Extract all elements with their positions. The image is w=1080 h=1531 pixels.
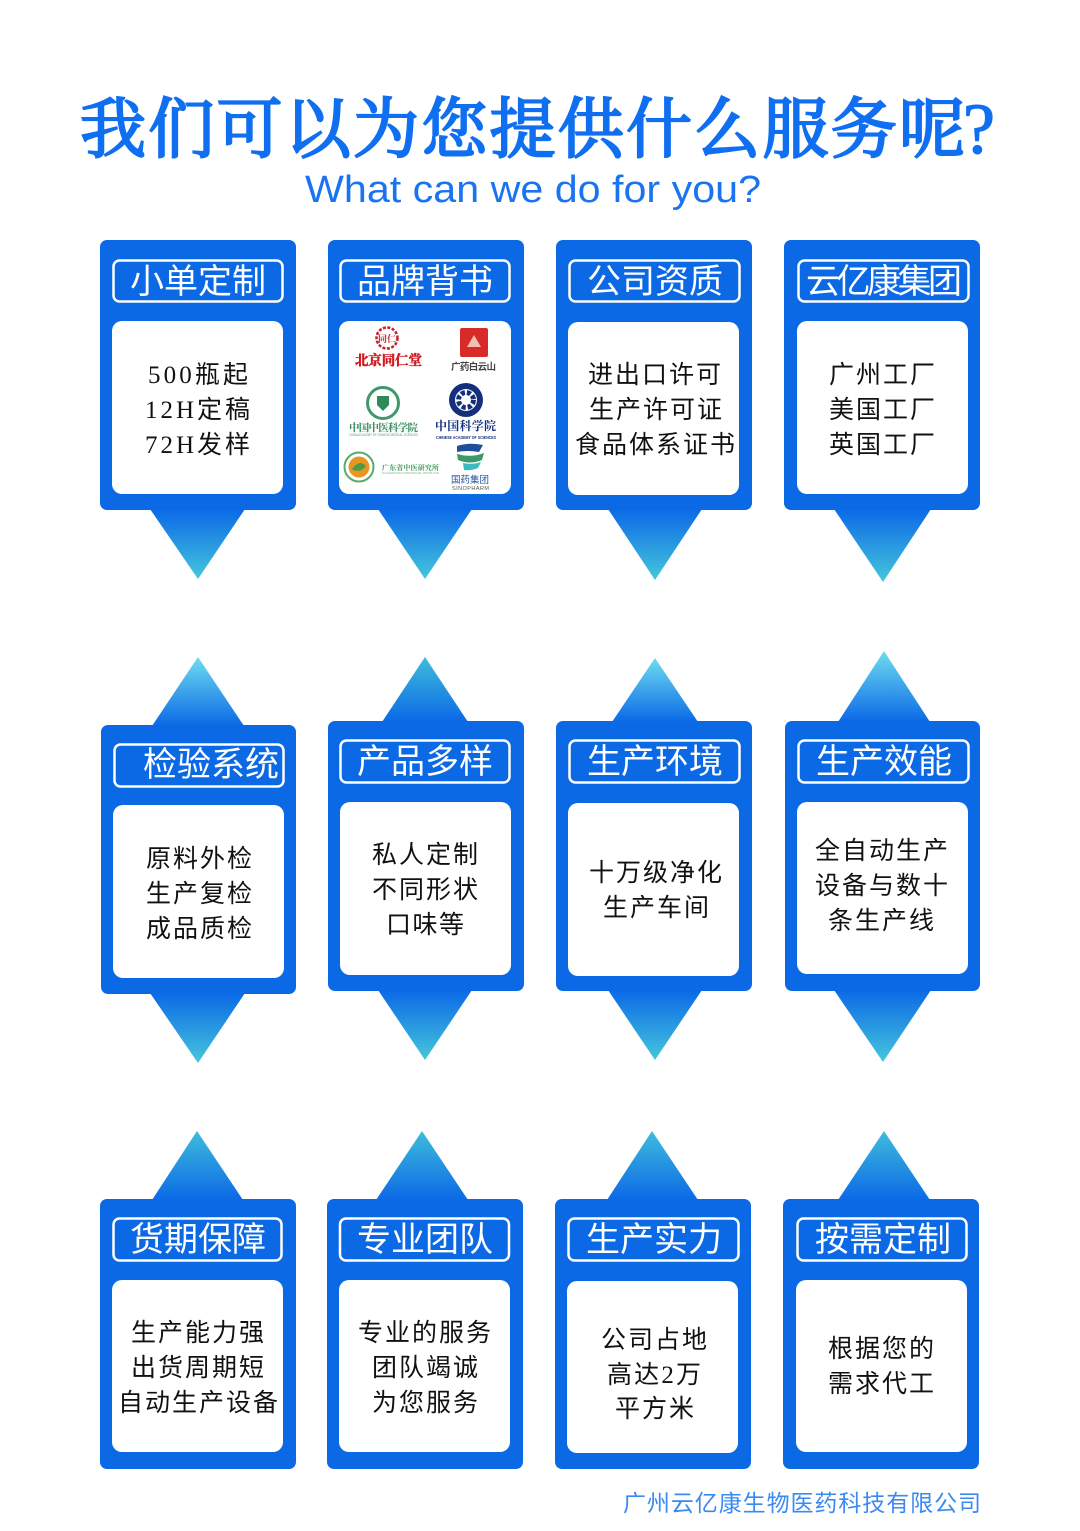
arrow: row 2 up column 1 — [152, 657, 244, 726]
panel: 货期保障: 生产能力强 — [131, 1319, 264, 1347]
panel: 生产效能: 设备与数十 — [815, 872, 948, 900]
panel: 云亿康集团: 美国工厂 — [829, 396, 935, 424]
logo: 国药集团: 国药集团 — [451, 474, 489, 486]
footer company name: 广州云亿康生物医药科技有限公司 — [623, 1490, 981, 1516]
panel: 产品多样: 私人定制 — [372, 841, 478, 869]
panel: 按需定制: 按需定制 — [815, 1221, 951, 1259]
panel: 生产效能: 生产效能 — [816, 743, 952, 781]
panel: 生产效能 — [785, 721, 980, 991]
panel: 专业团队: 专业的服务 — [358, 1319, 491, 1347]
panel: 小单定制: 小单定制 — [130, 263, 266, 301]
subtitle: What can we do for you? — [305, 169, 761, 211]
panel: 生产环境: 生产环境 — [587, 743, 723, 781]
panel: 检验系统: 检验系统 — [143, 746, 279, 784]
panel: 按需定制 — [783, 1199, 979, 1469]
panel: 检验系统 — [101, 725, 296, 994]
panel: 产品多样: 不同形状 — [372, 876, 478, 904]
panel: 公司资质: 生产许可证 — [589, 396, 722, 424]
panel: 生产实力: 平方米 — [615, 1395, 694, 1423]
arrow: row 3 up column 3 — [607, 1131, 698, 1200]
panel: 专业团队: 团队竭诚 — [372, 1354, 478, 1382]
panel: 生产实力: 生产实力 — [586, 1221, 722, 1259]
logo: 北京同仁堂: 同仁 — [378, 332, 396, 345]
panel: 云亿康集团: 英国工厂 — [829, 431, 935, 459]
panel: 专业团队 — [327, 1199, 523, 1469]
panel: 检验系统: 原料外检 — [146, 845, 252, 873]
arrow: row 1 column 2 — [378, 509, 472, 579]
title: ? — [963, 89, 995, 169]
panel: 小单定制: 500瓶起 — [148, 361, 248, 389]
panel: 货期保障: 自动生产设备 — [118, 1389, 278, 1417]
arrow: row 2 up column 2 — [382, 657, 468, 722]
panel: 产品多样: 口味等 — [386, 911, 464, 939]
panel: 生产效能: 条生产线 — [828, 907, 934, 935]
arrow: row 1 column 3 — [608, 509, 702, 580]
arrow: row 3 up column 4 — [838, 1131, 930, 1200]
panel: 小单定制 — [100, 240, 296, 510]
logo: 中国科学院 — [435, 383, 496, 440]
logo: 中国科学院: CHINESE ACADEMY OF SCIENCES — [436, 435, 496, 440]
panel: 云亿康集团: 云亿康集团 — [806, 263, 962, 301]
panel: 专业团队: 为您服务 — [372, 1389, 478, 1417]
panel: 生产实力: 公司占地 — [601, 1326, 707, 1354]
panel: 公司资质: 公司资质 — [587, 263, 723, 301]
panel: 生产实力 — [555, 1199, 751, 1469]
logo: 中国中医科学院: 中国中医科学院 — [349, 420, 418, 435]
logo: 中国中医科学院 — [349, 388, 419, 437]
logo: 广东省中医研究所: 广东省中医研究所 — [382, 463, 439, 473]
panel: 产品多样 — [328, 721, 524, 991]
panel: 货期保障: 出货周期短 — [131, 1354, 264, 1382]
panel: 检验系统: 生产复检 — [146, 880, 252, 908]
arrow: row 2 down column 4 — [834, 990, 931, 1062]
arrow: row 3 up column 2 — [376, 1131, 468, 1200]
panel: 云亿康集团: 广州工厂 — [829, 361, 935, 389]
panel: 小单定制: 12H定稿 — [145, 396, 250, 424]
arrow: row 2 up column 4 — [838, 651, 930, 722]
logo: 中国科学院: 中国科学院 — [435, 417, 496, 434]
arrow: row 2 up column 3 — [612, 658, 698, 722]
logo: 国药集团 — [451, 444, 489, 492]
panel: 货期保障: 货期保障 — [130, 1221, 266, 1259]
panel: 云亿康集团 — [784, 240, 980, 510]
panel: 按需定制: 根据您的 — [828, 1335, 934, 1363]
panel: 生产实力: 高达2万 — [607, 1361, 701, 1389]
logo: 广东省中医研究所: GUANGDONG PROVINCIAL INSTITUTE — [382, 471, 439, 475]
logo: 广药白云山: 广药白云山 — [451, 361, 496, 373]
panel: 按需定制: 需求代工 — [828, 1370, 934, 1398]
panel: 生产效能: 全自动生产 — [815, 837, 948, 865]
panel: 专业团队: 专业团队 — [357, 1221, 493, 1259]
logo: 广药白云山 — [451, 328, 496, 373]
panel: 生产环境: 生产车间 — [603, 894, 709, 922]
arrow: row 3 up column 1 — [152, 1131, 243, 1200]
panel: 公司资质 — [556, 240, 752, 510]
panel: 品牌背书 — [328, 240, 524, 510]
panel: 品牌背书: 品牌背书 — [357, 263, 493, 301]
panel: 公司资质: 食品体系证书 — [575, 431, 735, 459]
arrow: row 1 column 4 — [834, 509, 931, 582]
arrow: row 1 column 1 — [150, 509, 245, 579]
logo: 中国中医科学院: CHINA ACADEMY OF CHINESE MEDICAL SCIENCES — [349, 433, 419, 437]
title: 我们可以为您提供什么服务呢 — [80, 76, 965, 171]
panel: 货期保障 — [100, 1199, 296, 1469]
logo: 北京同仁堂: 北京同仁堂 — [355, 349, 422, 369]
panel: 小单定制: 72H发样 — [145, 431, 250, 459]
logo: 广东省中医研究所 — [344, 452, 439, 482]
panel: 生产环境 — [556, 721, 752, 991]
arrow: row 2 down column 1 — [150, 993, 245, 1063]
arrow: row 2 down column 3 — [608, 990, 702, 1060]
panel: 生产环境: 十万级净化 — [589, 859, 722, 887]
logo: 国药集团: SINOPHARM — [452, 486, 489, 492]
panel: 产品多样: 产品多样 — [357, 743, 493, 781]
panel: 公司资质: 进出口许可 — [588, 361, 721, 389]
logo: 北京同仁堂 — [355, 328, 422, 369]
arrow: row 2 down column 2 — [378, 990, 472, 1060]
panel: 检验系统: 成品质检 — [146, 915, 252, 943]
